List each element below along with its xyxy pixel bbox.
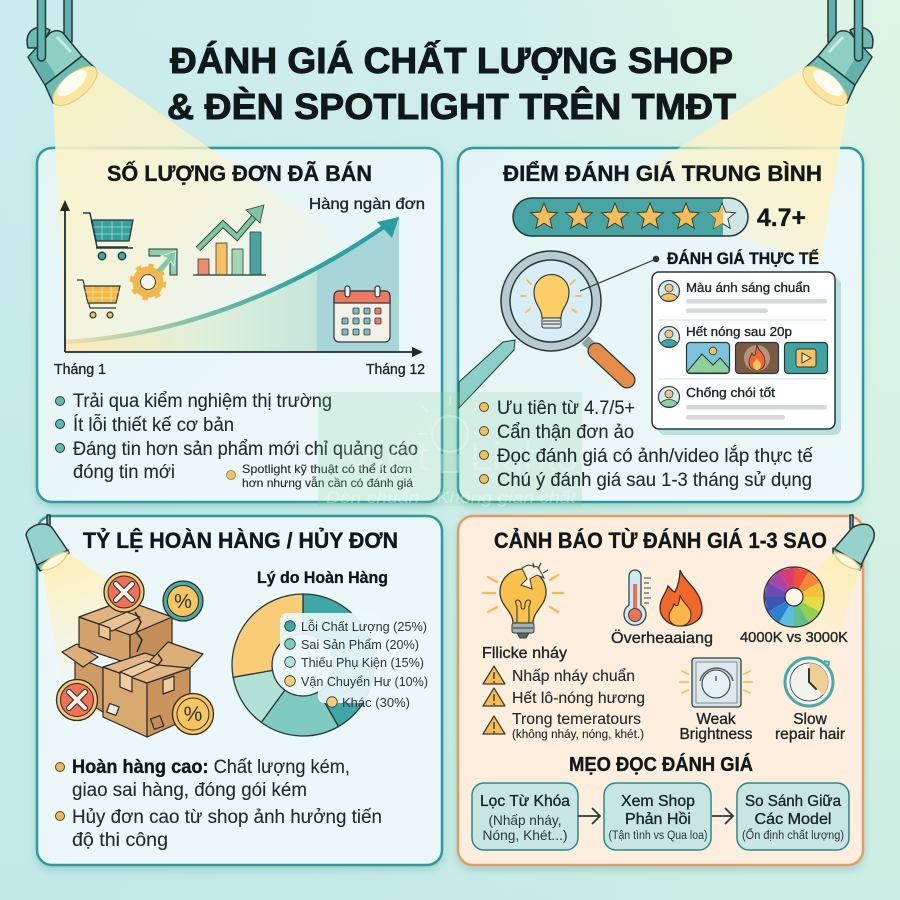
label: đánh giá thực tế: ĐÁNH GIÁ THỰC TẾ [667,249,819,268]
step 3 box: So Sánh Giữa [745,793,841,810]
panel: tỷ lệ hoàn hàng [37,516,442,865]
bullets: điểm đánh giá: Chú ý đánh giá sau 1-3 tháng sử dụng [497,470,812,491]
icon: x badge bottom [56,680,98,720]
donut chart [232,594,374,736]
panel: cảnh báo [458,516,863,865]
bullets: điểm đánh giá: Cẩn thận đơn ảo [497,422,634,443]
rear left box [62,644,103,712]
note: spotlight kỹ thuật: Spotlight kỹ thuật có thể ít đơn [242,462,412,476]
warning list [483,666,645,741]
icon: percent badge bottom: % [184,703,202,726]
review 3: Chống chói tốt [686,385,775,400]
front box [103,642,203,737]
label: colour temperature: 4000K vs 3000K [740,630,848,646]
chart: sales growth [54,196,425,378]
step 2 box: Phản Hồi [625,811,691,828]
bullets: hoàn hàng: giao sai hàng, đóng gói kém [72,780,307,801]
label: slow repair: Slow [793,711,828,728]
icon: percent badge top: % [174,591,192,613]
watermark [318,392,582,507]
panel: điểm đánh giá trung bình [458,148,863,502]
review 3 [658,385,827,420]
label: weak brightness: Brightness [680,726,753,743]
bullets: điểm đánh giá: Ưu tiên từ 4.7/5+ [497,398,635,419]
light beam panel 3 [42,552,135,690]
bullets: điểm đánh giá: Đọc đánh giá có ảnh/video lắp thực tế [497,445,813,467]
icon: x badge top [104,572,144,612]
arrow step 2 to 3 [712,808,733,824]
chart heading: lý do hoàn hàng: Lý do Hoàn Hàng [257,569,388,587]
bullets: hoàn hàng [56,757,382,851]
warning 3: (không nháy, nóng, khét.) [512,729,644,741]
connector line to label [580,256,659,291]
bullets: số lượng đơn: Đáng tin hơn sản phẩm mới chỉ quảng cáo [73,439,418,460]
spotlight panel 3 [26,515,69,571]
video thumbnail [784,342,828,374]
lamp arm behind magnifier [459,340,515,408]
donut legend: Lỗi Chất Lượng (25%) [301,619,427,634]
watermark: Việt [340,435,430,479]
bullets: hoàn hàng: độ thi công [72,830,168,851]
growth arrow head [377,217,399,238]
bullets: điểm đánh giá [480,398,813,491]
step 1 box: Lọc Từ Khóa [480,793,570,810]
donut legend: Thiếu Phụ Kiện (15%) [301,655,424,670]
icon: percent badge top [163,581,203,621]
icon: dimmer switch [680,658,752,707]
icon: clock [785,658,833,706]
label tháng 12: Tháng 12 [366,362,425,378]
label: flicker: Fllicke nháy [482,645,567,662]
note: spotlight kỹ thuật: hơn nhưng vẫn cần có đánh giá [242,475,413,490]
icon: broken bulb [483,563,563,638]
warning 3 [483,711,644,741]
watermark: Lights [470,435,577,479]
title [167,40,736,127]
label: weak brightness: Weak [696,711,736,728]
rating value: 4.7+ [757,204,806,232]
step 1 box: (Nhấp nháy, [488,812,562,828]
note: spotlight kỹ thuật [226,462,413,490]
icon: yellow cart [77,280,120,318]
donut legend: Khác (30%) [342,695,410,710]
spotlight top left [27,0,103,113]
donut legend: Sai Sản Phẩm (20%) [301,637,419,652]
warning 2: Hết lô-nóng hương [512,690,645,707]
donut legend: Vận Chuyển Hư (10%) [301,674,428,689]
heading: mẹo đọc đánh giá: MẸO ĐỌC ĐÁNH GIÁ [569,753,753,776]
icon: colour wheel [764,567,824,627]
bullets: số lượng đơn: đóng tin mới [73,462,175,483]
panel: số lượng đơn đã bán [37,148,442,502]
light beam top left [53,68,345,352]
heading: cảnh báo: CẢNH BÁO TỪ ĐÁNH GIÁ 1-3 SAO [494,528,827,553]
bullets: số lượng đơn [56,391,418,483]
x axis arrow [412,347,423,357]
bullets: hoàn hàng: Hoàn hàng cao: Chất lượng kém, [72,757,350,778]
y axis arrow [60,200,70,211]
heading: điểm đánh giá: ĐIỂM ĐÁNH GIÁ TRUNG BÌNH [503,161,822,186]
photo thumbnail [686,342,730,374]
area under curve [65,217,399,352]
light beam top right [600,68,848,262]
label: weak brightness [680,711,753,743]
step 2 box: (Tận tình vs Qua loa) [608,830,708,842]
step 3 box: Các Model [754,811,832,828]
review 1 [658,280,827,313]
title: ĐÁNH GIÁ CHẤT LƯỢNG SHOP [170,40,733,81]
review 2 with media [658,324,828,374]
rating bar with stars [513,198,748,236]
title: & ĐÈN SPOTLIGHT TRÊN TMĐT [167,85,736,127]
label tháng 1: Tháng 1 [54,362,106,378]
label: overheating: Överheaaiang [611,629,713,647]
icon: magnifier with bulb [501,251,627,380]
icon: percent badge bottom [172,694,214,734]
heading: số lượng đơn đã bán: SỐ LƯỢNG ĐƠN ĐÃ BÁN [107,160,372,186]
step 1 box [472,783,578,850]
review card [652,272,841,435]
spotlight top right [797,0,873,113]
bullets: số lượng đơn: Ít lỗi thiết kế cơ bản [73,414,234,436]
light beam panel 4 [750,553,860,660]
top box [79,600,172,664]
label: slow repair [775,711,845,743]
icon: damaged boxes [62,600,203,737]
icon: teal cart [83,213,133,260]
icon: flame [660,570,702,626]
step 2 box [604,783,711,850]
growth curve [65,226,385,342]
flame thumbnail [736,342,778,374]
icon: gear with arrow [136,249,177,294]
axes [65,208,416,352]
bullets: số lượng đơn: Trải qua kiểm nghiệm thị trường [73,391,332,412]
step 1 box: Nóng, Khét...) [482,827,568,843]
review 2 with media: Hết nóng sau 20p [686,324,792,339]
warning 3: Trong temeratours [512,711,641,728]
step 3 box: (Ổn định chất lượng) [742,829,844,842]
step 2 box: Xem Shop [621,793,695,810]
watermark: Đèn chuẩn - Không gian chất [326,488,577,507]
icon: thermometer [624,570,651,625]
spotlight panel 4 [833,515,874,570]
icon: bar chart with rising arrow [193,205,266,275]
label: slow repair: repair hair [775,726,845,743]
donut legend [280,613,428,710]
step 3 box [737,783,849,850]
icon: calendar [334,286,390,342]
label hàng ngàn đơn: Hàng ngàn đơn [309,196,425,213]
teal highlighted region [317,218,399,351]
review 1: Màu ánh sáng chuẩn [686,280,810,295]
bullets: hoàn hàng: Hủy đơn cao từ shop ảnh hưởng tiến [72,807,382,828]
arrow step 1 to 2 [578,808,600,824]
warning 1: Nhấp nháy chuẩn [512,668,635,685]
heading: tỷ lệ hoàn hàng: TỶ LỆ HOÀN HÀNG / HỦY ĐƠN [83,528,398,553]
